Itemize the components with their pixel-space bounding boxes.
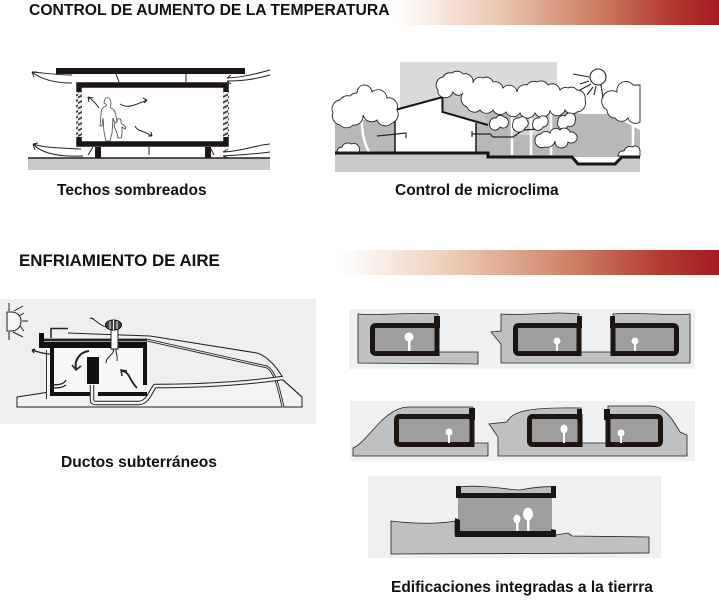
- ground: [28, 158, 270, 170]
- icon: sun: [573, 69, 606, 98]
- indoor air arrows: [88, 97, 152, 136]
- earth mass: [391, 521, 649, 554]
- label: ductos subterraneos: Ductos subterráneos: [61, 454, 217, 471]
- ground: [335, 153, 640, 172]
- ground mass: [17, 380, 302, 407]
- diagram: techos sombreados: [28, 68, 270, 170]
- vent cap: [106, 320, 122, 349]
- awnings: [377, 129, 538, 138]
- small trees: [514, 508, 533, 531]
- chimney hook: [51, 328, 68, 338]
- title: control de aumento de la temperatura: CONTROL DE AUMENTO DE LA TEMPERATURA: [29, 2, 390, 19]
- air arrows: [32, 318, 137, 388]
- small trees: [446, 424, 624, 443]
- label: techos sombreados: Techos sombreados: [57, 182, 207, 199]
- building shell: [39, 333, 147, 399]
- diagram: edificaciones integradas row 1: [349, 309, 695, 369]
- panel: [0, 299, 316, 424]
- building section: [76, 85, 229, 158]
- trunks: [362, 110, 633, 155]
- earth masses: [353, 407, 488, 456]
- small trees: [404, 332, 638, 351]
- banner: temperature heading gradient: [395, 0, 719, 25]
- shade roof: [56, 68, 245, 74]
- rooms: [396, 416, 660, 444]
- diagram: control de microclima: [332, 62, 640, 172]
- diagram: edificaciones integradas row 2: [350, 401, 695, 461]
- terrain line: [335, 153, 640, 164]
- sky panel: [400, 62, 557, 132]
- roof line: [68, 333, 283, 378]
- outdoor air arrows: [32, 70, 270, 158]
- diagram: edificaciones integradas row 3: [368, 476, 661, 558]
- earth masses: [358, 313, 478, 364]
- icon: half sun: [7, 303, 28, 340]
- building interior: [46, 346, 145, 394]
- title: enfriamiento de aire: ENFRIAMIENTO DE AIRE: [19, 251, 220, 270]
- room: [458, 498, 552, 531]
- outer air duct: [44, 340, 283, 407]
- banner: air cooling heading gradient: [340, 250, 719, 275]
- human figures: [100, 98, 126, 141]
- panel: [368, 476, 661, 558]
- label: edificaciones integradas: Edificaciones integradas a la tierrra: [391, 579, 653, 596]
- vegetation band: [335, 110, 640, 157]
- panel: [350, 401, 695, 461]
- underground duct: [92, 378, 283, 403]
- label: control de microclima: Control de microclima: [395, 182, 559, 199]
- roof supports: [88, 74, 214, 155]
- house: [395, 92, 488, 153]
- rooms: [372, 326, 676, 354]
- tree canopies: [332, 71, 640, 156]
- panel: [349, 309, 695, 369]
- diagram: ductos subterraneos: [0, 299, 316, 424]
